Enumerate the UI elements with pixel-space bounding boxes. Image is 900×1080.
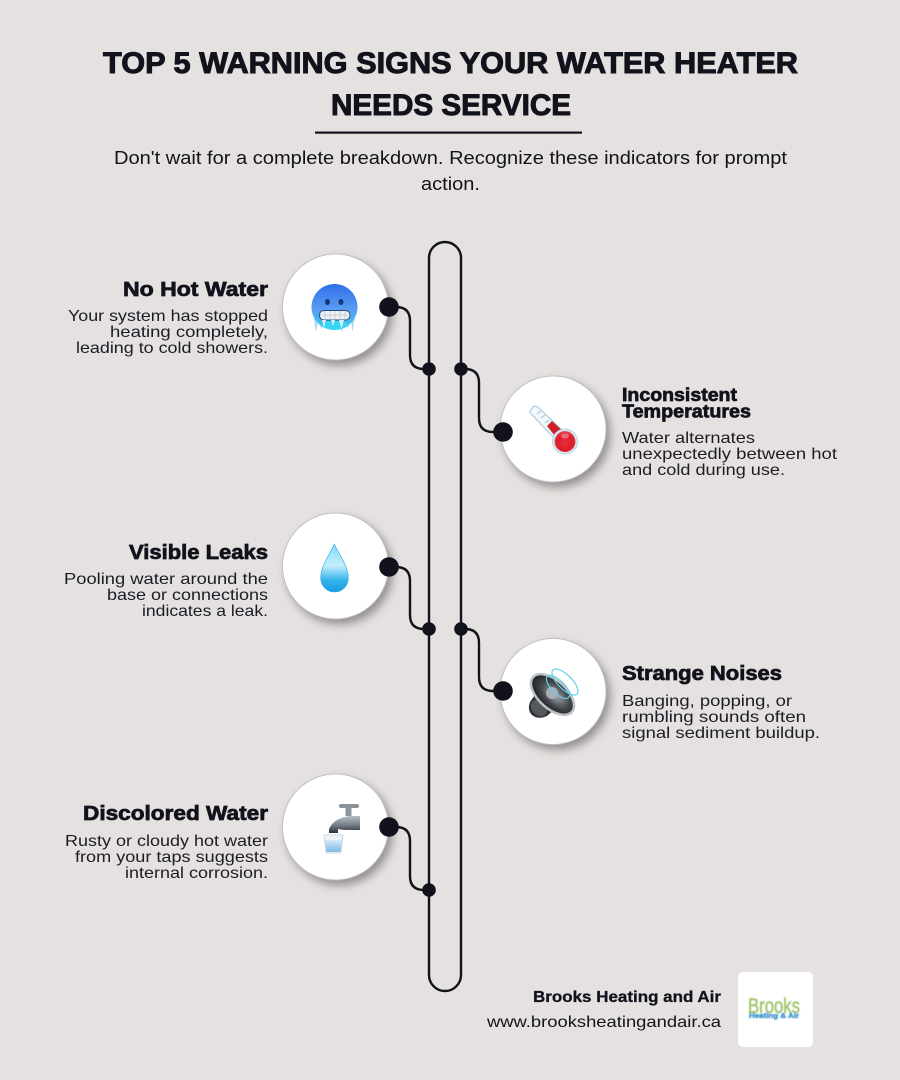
heading: Discolored Water	[83, 802, 268, 825]
icon circle	[500, 638, 606, 744]
title: NEEDS SERVICE	[331, 89, 571, 122]
footer website: www.brooksheatingandair.ca	[486, 1014, 721, 1031]
subtitle: action.	[421, 174, 480, 194]
icon: faucet and glass	[324, 804, 360, 853]
description: Water alternates	[622, 430, 755, 447]
central pill timeline	[429, 242, 461, 991]
description: heating completely,	[110, 324, 268, 341]
description: base or connections	[107, 587, 268, 604]
timeline node: no hot water	[422, 362, 436, 376]
logo: Heating & Air	[749, 1013, 799, 1020]
icon circle	[282, 774, 388, 880]
title	[103, 47, 798, 122]
panel: discolored water	[65, 774, 399, 882]
description: Banging, popping, or	[622, 693, 793, 710]
description: rumbling sounds often	[622, 709, 806, 726]
timeline node: visible leaks	[422, 622, 436, 636]
panel: inconsistent temperatures	[493, 376, 838, 482]
description: unexpectedly between hot	[622, 446, 838, 463]
connector dot	[493, 422, 513, 442]
heading: No Hot Water	[123, 278, 268, 301]
description: and cold during use.	[622, 462, 785, 479]
timeline node: discolored water	[422, 883, 436, 897]
connector: visible leaks	[389, 567, 429, 629]
icon circle	[500, 376, 606, 482]
footer company name: Brooks Heating and Air	[533, 989, 721, 1006]
description: leading to cold showers.	[76, 340, 268, 357]
heading: Visible Leaks	[129, 541, 268, 564]
connector: inconsistent temperatures	[461, 369, 503, 432]
connector: no hot water	[389, 307, 429, 369]
description: signal sediment buildup.	[622, 725, 820, 742]
description: indicates a leak.	[142, 603, 268, 620]
connector dot	[493, 681, 513, 701]
title: TOP 5 WARNING SIGNS YOUR WATER HEATER	[103, 47, 798, 80]
description	[622, 430, 838, 479]
description	[622, 693, 820, 742]
connector dot	[379, 557, 399, 577]
panel: strange noises	[493, 638, 820, 744]
heading	[622, 384, 751, 422]
timeline node: inconsistent temperatures	[454, 362, 468, 376]
description: Pooling water around the	[64, 571, 268, 588]
panel: visible leaks	[64, 513, 399, 620]
subtitle	[114, 148, 787, 194]
timeline node: strange noises	[454, 622, 468, 636]
icon circle	[282, 513, 388, 619]
connector dot	[379, 817, 399, 837]
heading: Strange Noises	[622, 662, 782, 685]
connector dot	[379, 297, 399, 317]
description: Rusty or cloudy hot water	[65, 833, 269, 850]
logo	[738, 972, 813, 1047]
icon circle	[282, 254, 388, 360]
connector: discolored water	[389, 827, 429, 890]
icon: speaker	[524, 665, 582, 722]
icon: water drop	[321, 544, 348, 592]
description	[65, 833, 269, 882]
description	[64, 571, 268, 620]
icon: freezing face	[312, 284, 358, 332]
connector: strange noises	[461, 629, 503, 691]
description	[68, 308, 268, 357]
heading: Temperatures	[622, 400, 751, 422]
subtitle: Don't wait for a complete breakdown. Recognize these indicators for prompt	[114, 148, 787, 168]
description: from your taps suggests	[75, 849, 268, 866]
logo: Brooks	[748, 995, 800, 1018]
panel: no hot water	[68, 254, 399, 360]
icon: thermometer	[530, 406, 578, 454]
heading: Inconsistent	[622, 384, 737, 405]
description: internal corrosion.	[125, 865, 268, 882]
description: Your system has stopped	[68, 308, 268, 325]
